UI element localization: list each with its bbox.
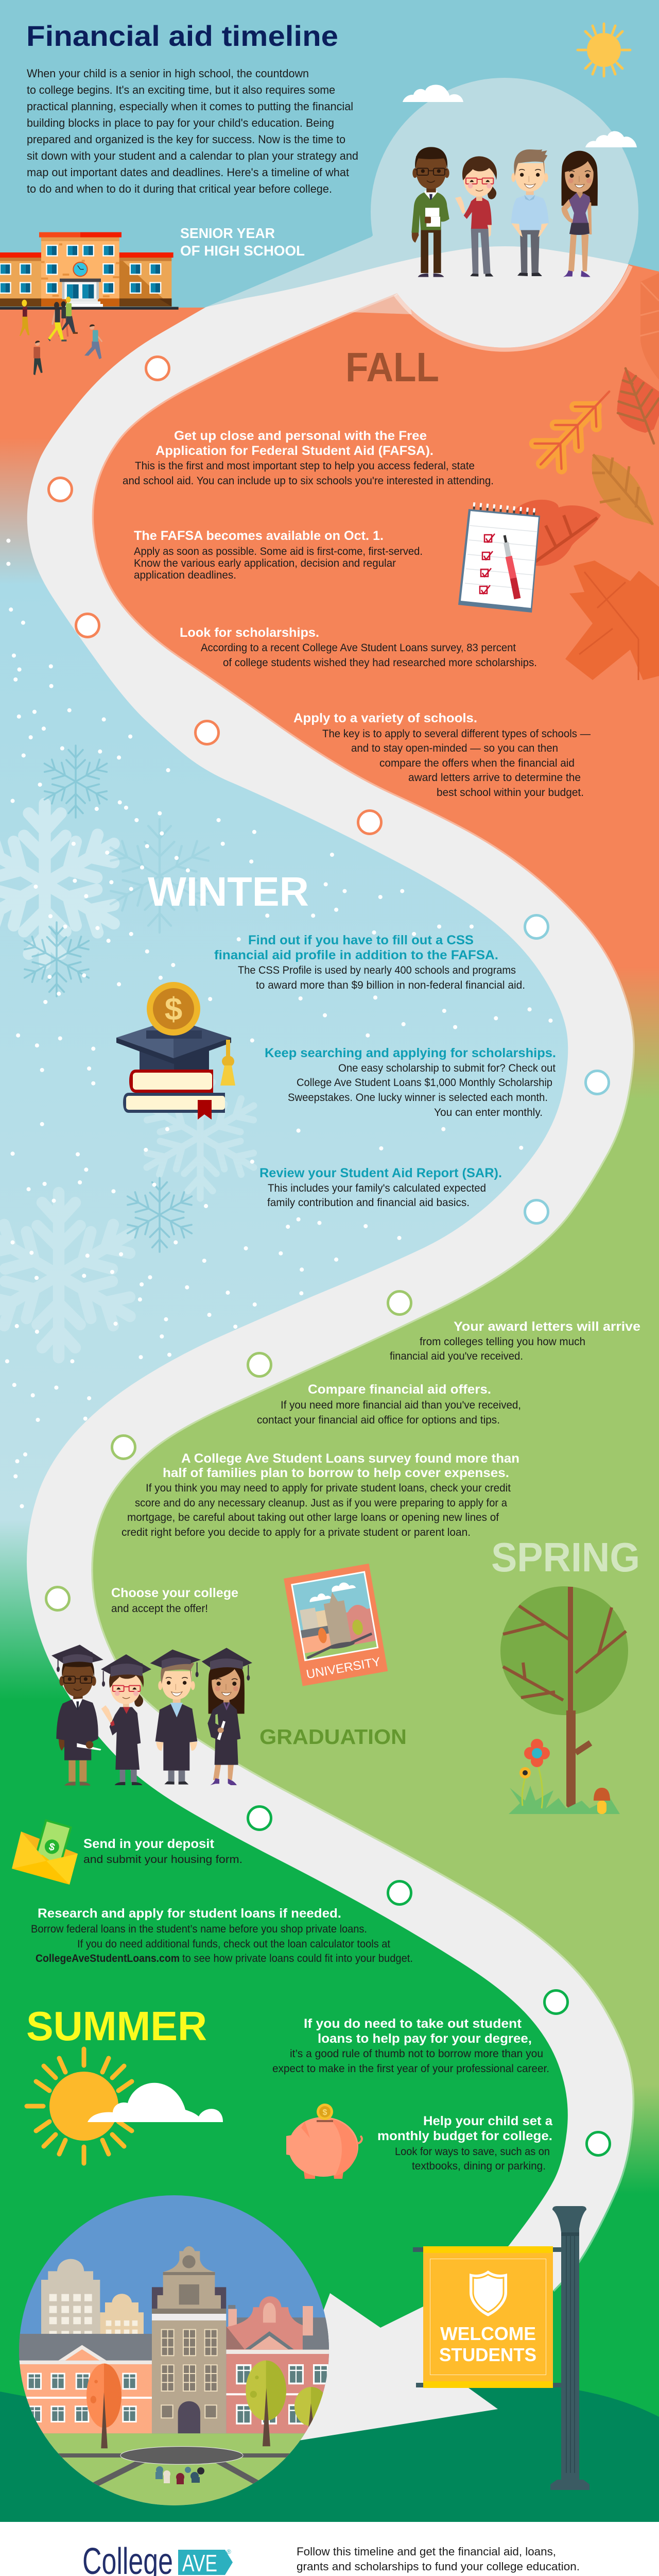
coin: $ <box>165 992 182 1027</box>
clock <box>73 262 88 276</box>
heading: Your award letters will arrive <box>454 1319 640 1334</box>
body: compare the offers when the financial aid <box>379 757 575 769</box>
heading: Keep searching and applying for scholarships. <box>265 1046 556 1060</box>
banner text <box>439 2323 536 2365</box>
mortarboard 4 <box>202 1648 252 1681</box>
footer text <box>297 2545 580 2576</box>
dark green hill <box>0 2385 659 2522</box>
section label: graduation: GRADUATION <box>259 1725 407 1749</box>
leaf: red <box>617 368 659 444</box>
timeline nodes: winter <box>525 915 609 1223</box>
background: fall and spring side gradient <box>91 264 659 2291</box>
season heading: fall: FALL <box>345 344 439 390</box>
body <box>390 1336 585 1362</box>
shield icon <box>470 2270 507 2316</box>
banner text: WELCOME <box>440 2323 536 2344</box>
illustration: four students <box>411 147 598 277</box>
timeline nodes: summer <box>248 1806 610 2156</box>
intro paragraph <box>27 67 358 195</box>
heading: A College Ave Student Loans survey found more than <box>181 1451 519 1466</box>
walkways <box>58 2453 290 2486</box>
step: research loans <box>31 1906 413 1964</box>
heading: Look for scholarships. <box>180 625 319 640</box>
heading: Help your child set a <box>423 2114 553 2128</box>
label: senior year: OF HIGH SCHOOL <box>180 243 305 259</box>
body: If you do need additional funds, check out the loan calculator tools at <box>77 1938 390 1950</box>
body <box>267 1182 486 1209</box>
heading: Compare financial aid offers. <box>308 1382 491 1397</box>
step: deposit <box>83 1837 242 1866</box>
heading: Get up close and personal with the Free <box>174 429 427 443</box>
body <box>238 964 525 991</box>
right wing <box>226 2296 329 2434</box>
heading <box>304 2016 532 2046</box>
body: One easy scholarship to submit for? Check out <box>338 1062 556 1074</box>
step: FAFSA date <box>134 529 423 581</box>
body: This includes your family's calculated expected <box>268 1182 486 1194</box>
seated students <box>155 2466 204 2484</box>
body <box>322 728 591 799</box>
tassel <box>220 1040 235 1086</box>
central tower <box>152 2246 226 2433</box>
graduate 4 <box>207 1659 245 1785</box>
body: If you need more financial aid than you've received, <box>281 1399 521 1411</box>
icon: envelope with money <box>12 1819 78 1885</box>
intro paragraph: building blocks in place to pay for your child's education. Being <box>27 116 334 129</box>
illustration: spring tree <box>500 1586 628 1811</box>
graduate 1 <box>56 1655 101 1786</box>
background tower: cream <box>100 2294 144 2334</box>
heading: Application for Federal Student Aid (FAFSA). <box>155 444 433 458</box>
speech bubble halo <box>206 78 638 346</box>
icon: summer cloud <box>88 2083 223 2122</box>
graduate 3 <box>155 1657 197 1785</box>
body <box>122 1482 511 1538</box>
heading: Apply to a variety of schools. <box>293 711 477 725</box>
icon: cloud <box>585 131 637 147</box>
body: expect to make in the first year of your professional career. <box>272 2063 549 2075</box>
body: to see how private loans could fit into your budget. <box>182 1953 413 1964</box>
leaf: red behind notepad <box>515 500 601 566</box>
student 4 <box>562 151 598 277</box>
intro paragraph: prepared and organized is the key for success. Now is the time to <box>27 133 345 146</box>
step: CSS profile <box>214 933 525 991</box>
body: family contribution and financial aid basics. <box>267 1197 470 1209</box>
step: borrow rule of thumb <box>272 2016 549 2075</box>
label: senior year: SENIOR YEAR <box>180 225 275 241</box>
body <box>395 2146 550 2172</box>
step: SAR <box>259 1166 502 1209</box>
icon: envelope with money: $ <box>47 1841 56 1853</box>
left wing <box>15 2334 152 2433</box>
graduate 2 <box>101 1664 144 1785</box>
body: mortgage, be careful about taking out other large loans or opening new lines of <box>127 1512 499 1523</box>
timeline nodes: spring <box>46 1291 411 1611</box>
body: You can enter monthly. <box>434 1107 543 1118</box>
heading: half of families plan to borrow to help cover expenses. <box>163 1466 509 1480</box>
icon: summer sun <box>27 2049 141 2163</box>
coin <box>147 982 200 1036</box>
season heading: summer: SUMMER <box>26 2003 207 2049</box>
snow dots <box>7 540 550 1506</box>
body: to award more than $9 billion in non-federal financial aid. <box>256 979 525 991</box>
student 3 <box>511 149 549 276</box>
body: contact your financial aid office for options and tips. <box>257 1414 500 1426</box>
footer band <box>0 2522 659 2576</box>
body <box>134 546 423 581</box>
icon: piggy bank: $ <box>323 2108 327 2117</box>
heading <box>155 429 433 458</box>
lamp post <box>550 2206 589 2490</box>
step: variety of schools <box>293 711 591 799</box>
sky <box>15 2192 335 2512</box>
icon: notepad with checklist <box>458 504 540 613</box>
illustration: graduates <box>51 1645 252 1786</box>
timeline nodes: fall <box>48 357 381 834</box>
body <box>123 460 494 487</box>
body: The key is to apply to several different types of schools — <box>322 728 591 740</box>
leaf: maple <box>565 561 659 680</box>
central block <box>39 232 122 307</box>
step: monthly budget <box>377 2114 553 2172</box>
title: Financial aid timeline <box>26 20 338 52</box>
snowflakes <box>0 745 262 1358</box>
body: and accept the offer! <box>111 1603 208 1615</box>
logo: College Ave Student Loans: AVE <box>182 2550 217 2576</box>
body: Borrow federal loans in the student’s name before you shop private loans. <box>31 1923 367 1935</box>
body: and submit your housing form. <box>83 1854 242 1866</box>
mortarboard 3 <box>150 1650 201 1677</box>
body: According to a recent College Ave Student Loans survey, 83 percent <box>201 642 516 654</box>
body: Look for ways to save, such as on <box>395 2146 550 2158</box>
body: textbooks, dining or parking. <box>412 2160 546 2172</box>
welcome banner <box>413 2246 562 2388</box>
heading: Choose your college <box>111 1586 238 1600</box>
body: from colleges telling you how much <box>420 1336 585 1348</box>
body: score and do any necessary cleanup. Just as if you were preparing to apply for a <box>135 1497 507 1509</box>
footer text: grants and scholarships to fund your college education. <box>297 2560 580 2573</box>
heading: Find out if you have to fill out a CSS <box>248 933 474 947</box>
shield outline <box>473 2275 504 2312</box>
body: credit right before you decide to apply for a private student or parent loan. <box>122 1527 471 1538</box>
fall leaves <box>515 273 659 680</box>
road edge highlight <box>91 293 633 2291</box>
cap board <box>116 1019 231 1064</box>
body: financial aid you've received. <box>390 1350 523 1362</box>
intro paragraph: to college begins. It's an exciting time, but it also requires some <box>27 83 335 96</box>
body: Apply as soon as possible. Some aid is first-come, first-served. <box>134 546 423 557</box>
body: and to stay open-minded — so you can then <box>351 742 558 754</box>
illustration: walking students <box>20 297 102 375</box>
intro paragraph: When your child is a senior in high school, the countdown <box>27 67 309 80</box>
banner text: STUDENTS <box>439 2344 536 2365</box>
books <box>123 1070 225 1120</box>
windows <box>0 245 161 294</box>
body: CollegeAveStudentLoans.com <box>36 1953 180 1964</box>
body: application deadlines. <box>134 569 236 581</box>
leaf: top right <box>640 273 659 380</box>
body: award letters arrive to determine the <box>408 772 581 784</box>
footer text: Follow this timeline and get the financial aid, loans, <box>297 2545 556 2558</box>
icon: sun <box>578 24 630 76</box>
student 1 <box>411 147 449 277</box>
trees <box>86 2361 327 2448</box>
body: it’s a good rule of thumb not to borrow more than you <box>290 2048 543 2060</box>
heading: Review your Student Aid Report (SAR). <box>259 1166 502 1180</box>
mortarboard 1 <box>51 1645 103 1672</box>
illustration: college campus <box>15 2192 341 2513</box>
body: Know the various early application, decision and regular <box>134 557 396 569</box>
leaf: oak <box>534 392 609 469</box>
heading: loans to help pay for your degree, <box>318 2031 532 2046</box>
label: senior year <box>180 225 305 259</box>
body: and school aid. You can include up to six schools you're interested in attending. <box>123 475 494 487</box>
body <box>288 1062 556 1118</box>
step: FAFSA intro <box>123 429 494 487</box>
intro paragraph: practical planning, especially when it comes to putting the financial <box>27 100 353 113</box>
bubble rim <box>395 266 631 350</box>
left wing <box>0 252 41 307</box>
background: sky <box>0 0 659 308</box>
cap base <box>140 1046 209 1071</box>
body: Sweepstakes. One lucky winner is selected each month. <box>288 1092 548 1104</box>
heading: Research and apply for student loans if needed. <box>38 1906 341 1921</box>
step: scholarships <box>180 625 537 669</box>
body <box>272 2048 549 2075</box>
icon: graduation cap, coin and books <box>116 982 235 1120</box>
heading: financial aid profile in addition to the FAFSA. <box>214 948 498 962</box>
body: best school within your budget. <box>437 787 584 799</box>
entrance <box>60 279 103 307</box>
step: choose college <box>111 1586 238 1615</box>
intro paragraph: map out important dates and deadlines. Here's a timeline of what <box>27 166 349 179</box>
heading: Send in your deposit <box>83 1837 215 1851</box>
step: survey on borrowing <box>122 1451 519 1538</box>
heading <box>163 1451 519 1480</box>
mortarboard 2 <box>101 1654 151 1687</box>
body: College Ave Student Loans $1,000 Monthly Scholarship <box>297 1077 552 1089</box>
heading: The FAFSA becomes available on Oct. 1. <box>134 529 384 543</box>
icon: red pen <box>505 535 517 599</box>
body <box>31 1923 413 1964</box>
heading: If you do need to take out student <box>304 2016 522 2031</box>
student 2 <box>455 156 497 277</box>
background tower: beige <box>41 2259 100 2334</box>
body: The CSS Profile is used by nearly 400 schools and programs <box>238 964 516 976</box>
lawn <box>43 2433 305 2505</box>
icon: university poster <box>284 1564 388 1686</box>
step: compare offers <box>257 1382 521 1426</box>
intro paragraph: sit down with your student and a calendar to plan your strategy and <box>27 149 358 162</box>
season heading: winter: WINTER <box>148 869 309 914</box>
winding road <box>27 246 633 2445</box>
heading <box>214 933 498 962</box>
logo: College Ave Student Loans: ® <box>227 2548 231 2555</box>
icon: university poster: UNIVERSITY <box>305 1655 381 1682</box>
heading: monthly budget for college. <box>377 2129 552 2143</box>
body: of college students wished they had researched more scholarships. <box>223 657 537 669</box>
step: award letters <box>390 1319 640 1362</box>
season heading: spring: SPRING <box>491 1534 640 1580</box>
intro paragraph: to do and when to do it during that critical year before college. <box>27 182 332 195</box>
body <box>257 1399 521 1426</box>
icon: cloud <box>403 84 463 102</box>
heading <box>377 2114 553 2143</box>
body: If you think you may need to apply for private student loans, check your credit <box>146 1482 511 1494</box>
mortarboards <box>51 1645 252 1687</box>
icon: piggy bank <box>286 2104 362 2179</box>
leaf: brown <box>592 454 654 526</box>
bricks <box>41 243 119 297</box>
body <box>201 642 537 669</box>
body: This is the first and most important step to help you access federal, state <box>135 460 475 472</box>
right wing <box>119 252 174 307</box>
illustration: high school building <box>0 232 179 310</box>
illustration: flowers, grass and mushroom <box>509 1739 620 1814</box>
step: keep searching <box>265 1046 556 1118</box>
